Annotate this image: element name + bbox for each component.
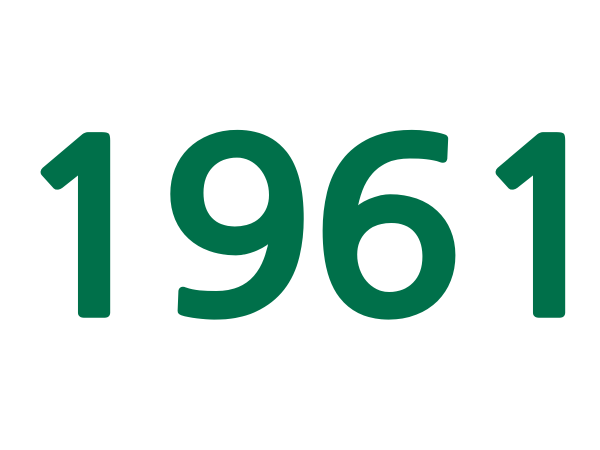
year heading: 1961: 9: [158, 115, 316, 351]
year heading: 1961: 6: [308, 115, 466, 351]
year heading: 1961: [9, 115, 600, 351]
year heading: 1961: 1: [9, 115, 167, 351]
